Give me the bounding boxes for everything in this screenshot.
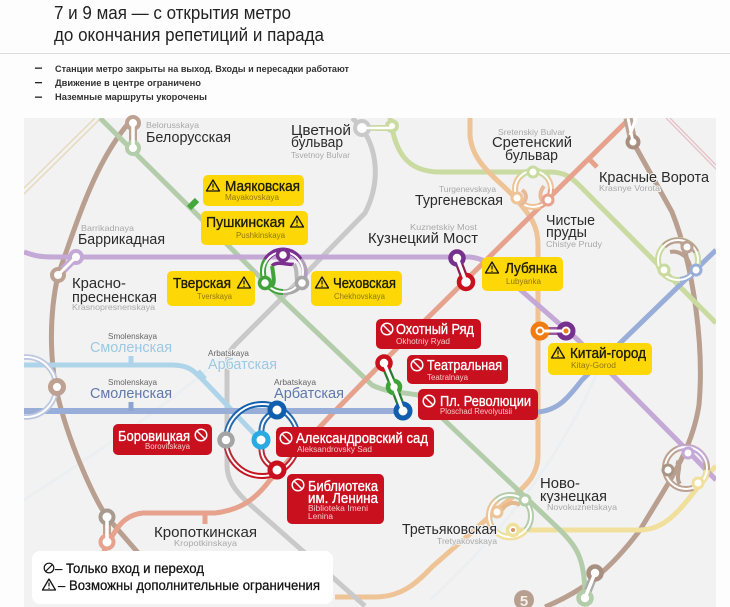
station names: Смоленская <box>90 386 172 402</box>
label: Ploshchad Revolyutsii: Ploschad Revolyutsii <box>440 407 512 416</box>
label: Ploshchad Revolyutsii <box>418 389 538 420</box>
label: Okhotny Ryad: Okhotniy Ryad <box>396 337 450 346</box>
label: Kitay-Gorod <box>548 343 652 375</box>
label: Aleksandrovsky Sad <box>276 427 434 457</box>
label: Pushkinskaya: Pushkinskaya <box>236 231 286 240</box>
stubs <box>131 356 205 379</box>
legend: – Возможны дополнительные ограничения <box>58 578 320 593</box>
bullet list <box>35 64 350 102</box>
label: Aleksandrovsky Sad: Aleksandrovsky Sad <box>297 445 372 454</box>
station names: Баррикадная <box>78 232 165 248</box>
station names: Цветной <box>291 123 351 139</box>
hub: Komsomolskaya <box>628 118 638 148</box>
dark green <box>100 118 585 598</box>
hub: Park Kultury <box>100 510 114 548</box>
label: Borovitskaya <box>113 424 212 455</box>
hub: Lubyanka Kuznetsky Most <box>450 252 473 289</box>
hub: Serpukhovskaya pair <box>578 566 602 604</box>
brown ring <box>51 118 700 607</box>
label: Mayakovskaya: Mayakovskaya <box>225 193 280 202</box>
station names: Barrikadnaya <box>81 223 134 233</box>
label: Kitay-Gorod: Китай-город <box>570 346 646 362</box>
station names: Krasnopresnenskaya <box>72 302 155 312</box>
station names: Tretyakovskaya <box>437 536 497 546</box>
blue right line <box>538 250 716 412</box>
hub: Pushkinskaya Tverskaya Chekhovskaya <box>260 250 308 292</box>
station names: Kropotkinskaya <box>174 538 237 548</box>
bullet list: Станции метро закрыты на выход. Входы и пересадки работают <box>55 64 350 74</box>
bullet list: Наземные маршруты укорочены <box>55 92 207 102</box>
station names: пресненская <box>72 290 157 306</box>
hub: Barrikadnaya <box>52 251 82 281</box>
light green <box>390 118 716 323</box>
station names: Novokuznetskaya <box>547 502 617 512</box>
station names: Смоленская <box>90 340 172 356</box>
hub: Tsvetnoy top <box>355 121 397 135</box>
station names: Ново- <box>540 476 580 492</box>
label: Teatralnaya: Театральная <box>427 358 502 374</box>
hub: Ploshchad Revolyutsii <box>378 356 410 418</box>
station names: Кузнецкий Мост <box>368 231 478 247</box>
label: Biblioteka Lenina: Lenina <box>308 512 334 521</box>
hub: Turgenevskaya <box>512 167 553 207</box>
station names: Тургеневская <box>415 193 503 209</box>
station names: Arbatskaya <box>274 378 317 387</box>
station names: Белорусская <box>146 130 231 146</box>
label: Ploshchad Revolyutsii: Пл. Революции <box>440 394 531 410</box>
label: Biblioteka Lenina <box>287 474 384 524</box>
station names: Чистые <box>546 213 595 229</box>
hub: Novokuznetskaya Tretyakovskaya <box>489 495 531 537</box>
legend <box>32 551 333 604</box>
station names: Krasnye Vorota <box>599 183 660 193</box>
label: Chekhovskaya: Чеховская <box>333 276 396 292</box>
grey <box>227 118 375 606</box>
station names: Tsvetnoy Bulvar <box>291 150 350 160</box>
label: Pushkinskaya: Пушкинская <box>206 215 285 231</box>
label: Tverskaya: Тверская <box>173 276 231 292</box>
label: Pushkinskaya <box>201 211 308 245</box>
hub: Kievskaya <box>24 354 66 420</box>
station names: Belorusskaya <box>146 120 199 130</box>
orange <box>335 118 538 597</box>
label: Lubyanka: Лубянка <box>505 261 558 277</box>
label: Mayakovskaya: Маяковская <box>225 179 300 195</box>
label: Teatralnaya <box>407 355 508 384</box>
station names: бульвар <box>291 135 343 151</box>
station names: Сретенский <box>492 135 572 151</box>
label: Biblioteka Lenina: Biblioteka Imeni <box>308 504 368 513</box>
title: до окончания репетиций и парада <box>54 25 325 45</box>
hub: Belorusskaya <box>127 117 139 154</box>
station names: Smolenskaya <box>108 332 158 341</box>
label: Okhotny Ryad <box>376 319 481 349</box>
label: Lubyanka: Lubyanka <box>506 277 542 286</box>
yellow <box>512 466 716 530</box>
station names: Кропоткинская <box>154 525 257 541</box>
purple <box>24 252 716 480</box>
label: Biblioteka Lenina: Библиотека <box>308 479 379 495</box>
station names: Красные Ворота <box>599 170 710 186</box>
metro lines <box>24 118 716 607</box>
light blue <box>24 365 262 442</box>
legend: – Только вход и переход <box>55 561 204 576</box>
label: Kitay-Gorod: Kitay-Gorod <box>571 361 616 370</box>
station names: кузнецкая <box>540 489 607 505</box>
bullet list: Движение в центре ограничено <box>55 78 202 88</box>
hub: Kitay-Gorod <box>533 324 573 338</box>
label: Tverskaya <box>167 271 255 306</box>
label: Teatralnaya: Teatralnaya <box>427 373 469 382</box>
station names: Chistye Prudy <box>546 239 603 249</box>
label: Borovitskaya: Боровицкая <box>118 429 190 445</box>
label: Tverskaya: Tverskaya <box>197 292 233 301</box>
title <box>54 3 325 45</box>
label: Aleksandrovsky Sad: Александровский сад <box>296 431 428 447</box>
icon: Mayakovskaya marker <box>189 200 197 208</box>
station names: Арбатская <box>208 357 277 373</box>
title: 7 и 9 мая — с открытия метро <box>54 3 291 23</box>
panel: metro map <box>0 117 716 607</box>
station names: бульвар <box>505 148 558 164</box>
station names: Sretenskiy Bulvar <box>498 127 565 137</box>
hub: Taganskaya <box>663 447 707 489</box>
station names: Turgenevskaya <box>439 184 496 194</box>
station names: Smolenskaya <box>108 378 158 387</box>
icon: route 5 <box>514 590 534 607</box>
label: Borovitskaya: Borovitskaya <box>145 442 191 451</box>
station names: Красно- <box>72 276 126 292</box>
station names: Arbatskaya <box>208 349 250 358</box>
label: Chekhovskaya <box>311 271 402 306</box>
station names: пруды <box>546 225 587 241</box>
label: Lubyanka <box>482 257 563 291</box>
red/pink line <box>100 120 628 560</box>
station names: Арбатская <box>274 386 344 402</box>
label: Mayakovskaya <box>203 175 304 206</box>
hub: Kurskaya <box>658 240 701 280</box>
label: Chekhovskaya: Chekhovskaya <box>334 292 386 301</box>
hub: Arbatskaya Aleksandrovsky Sad <box>220 403 298 477</box>
station names: Третьяковская <box>402 522 497 538</box>
station names: Kuznetskiy Most <box>410 222 478 232</box>
station names <box>72 120 710 548</box>
label: Biblioteka Lenina: им. Ленина <box>308 491 379 507</box>
label: Okhotny Ryad: Охотный Ряд <box>396 322 474 338</box>
